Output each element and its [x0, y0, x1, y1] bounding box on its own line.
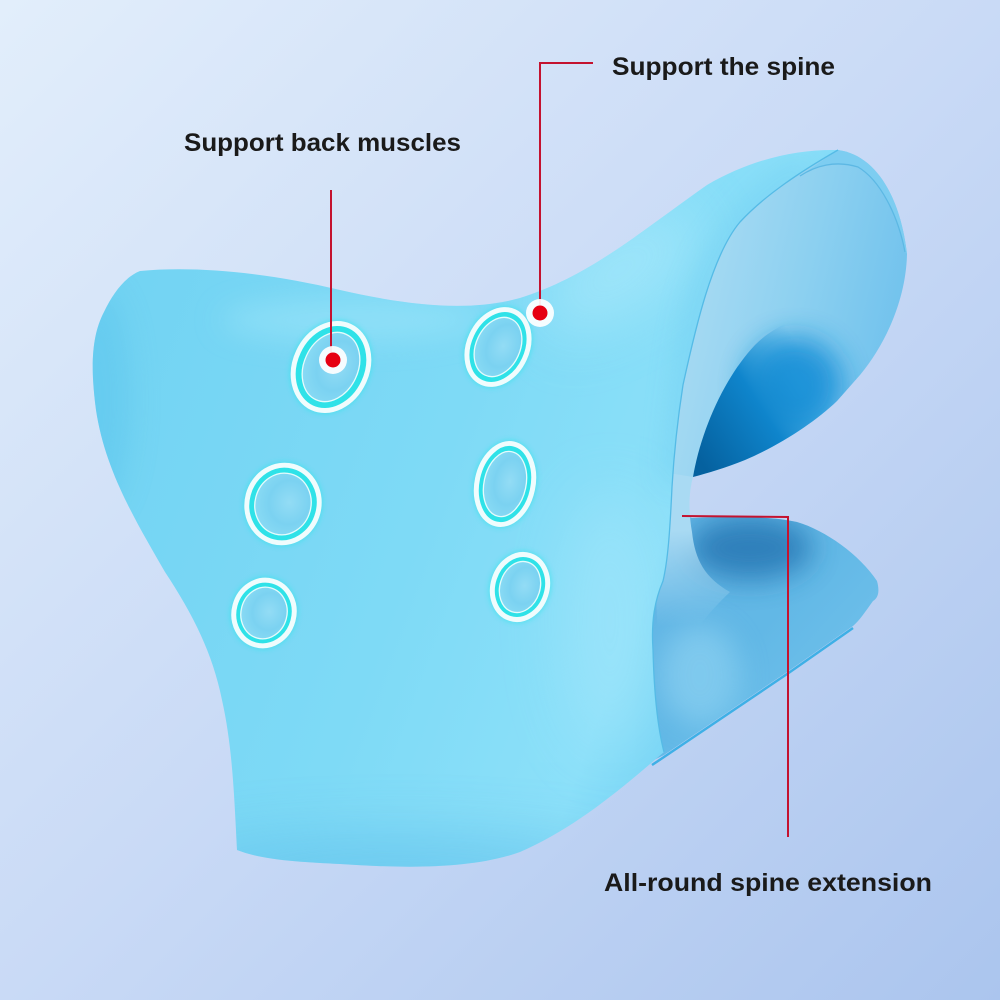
callout: support back muscles: [184, 129, 461, 374]
massage point 1: [278, 310, 384, 424]
leader line and marker: back muscles: [319, 190, 347, 374]
pillow lower lobe: [651, 517, 878, 766]
label: support the spine: Support the spine: [612, 53, 835, 81]
massage point 4: [468, 437, 542, 531]
massage point 5: [225, 572, 303, 654]
neck pillow product: [70, 150, 907, 900]
pillow inner hollow: [693, 319, 850, 480]
leader line and marker: spine: [526, 63, 593, 327]
callout: all-round spine extension: [604, 516, 932, 897]
pillow front face: [70, 150, 838, 900]
label: support back muscles: Support back muscles: [184, 129, 461, 157]
label: all-round spine extension: All-round spine extension: [604, 869, 932, 897]
massage point 2: [454, 298, 542, 396]
pillow neck section: [650, 470, 730, 680]
pillow top band: [800, 150, 907, 254]
massage point 3: [237, 456, 329, 552]
leader line: spine extension: [682, 516, 788, 837]
massage point 6: [483, 546, 557, 628]
pillow side face: [656, 150, 907, 616]
callout: support the spine: [526, 53, 835, 327]
